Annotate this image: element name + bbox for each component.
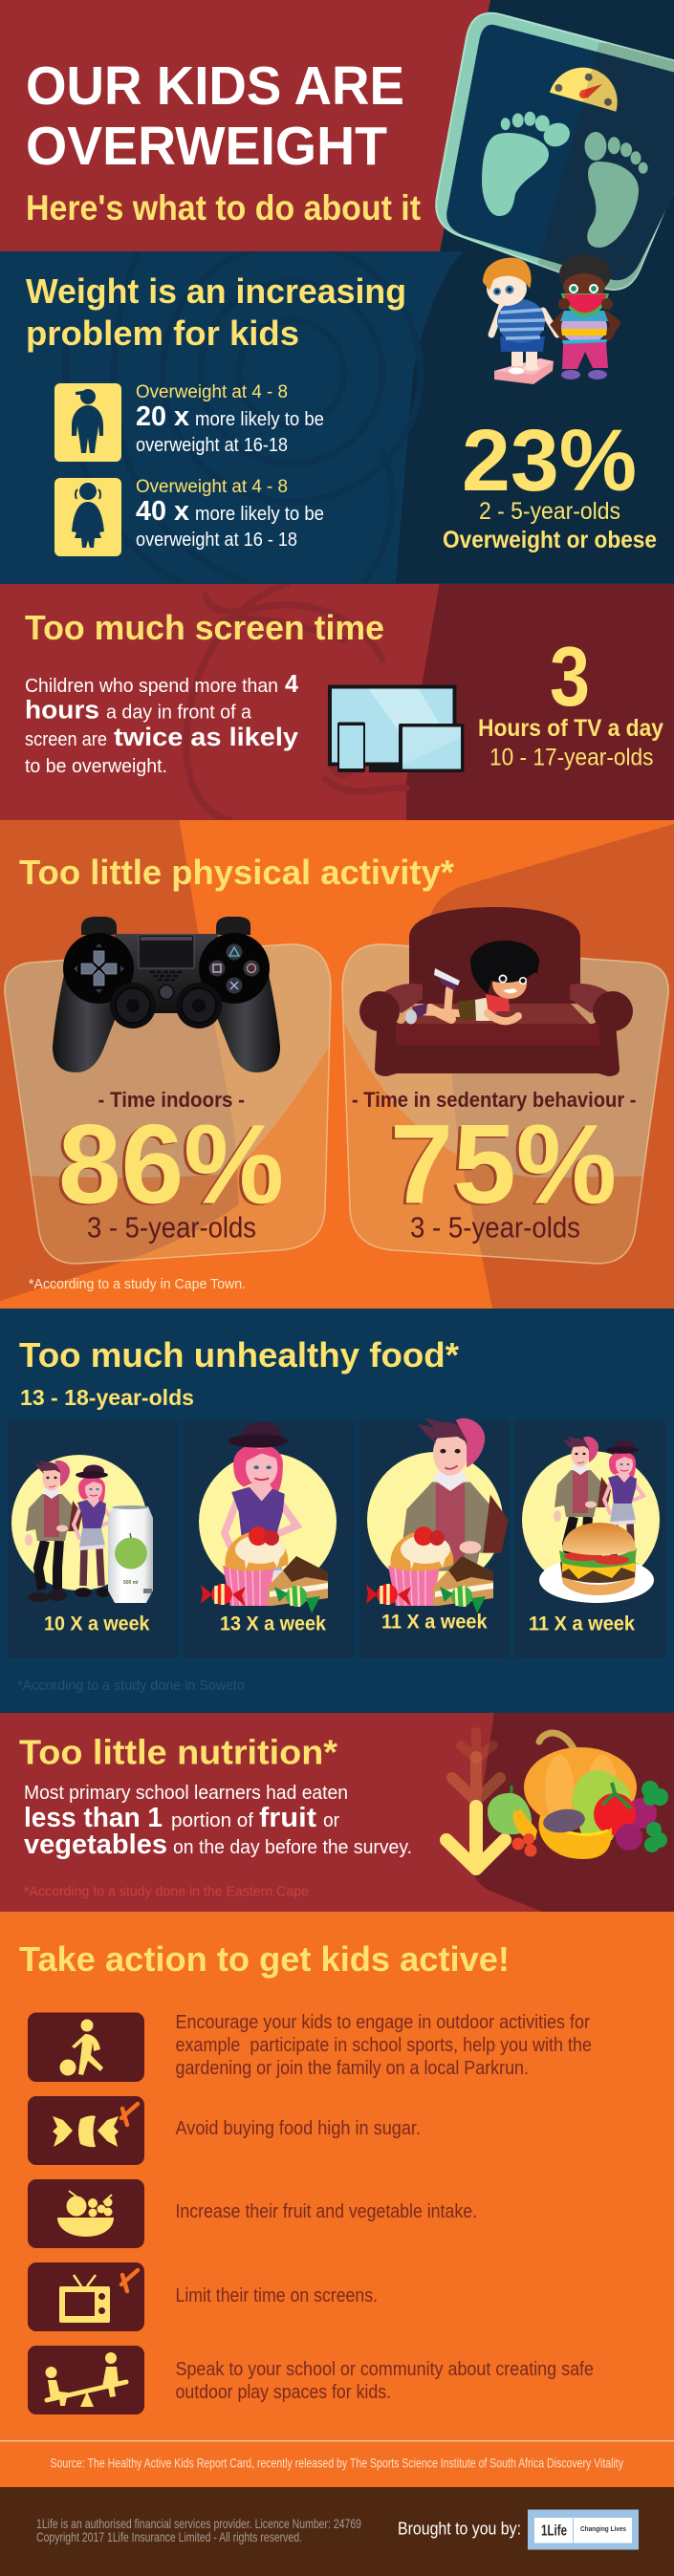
icon: burger [539,1523,654,1603]
text: Limit their time on screens. [176,2285,378,2306]
text: nutrition explanation: fruit [259,1803,316,1833]
text: outdoor play spaces for kids. [176,2382,391,2403]
panel: unhealthy food [0,1309,674,1713]
title [26,55,404,177]
panel: time indoors card [0,937,335,1264]
text: screen time explanation [25,669,299,777]
panel: weight problem [0,244,674,583]
text: Encourage your kids to engage in outdoor activities for [176,2012,590,2033]
illustration: boy on scale [483,258,557,384]
text: screen time explanation: hours [25,696,99,725]
legal text: Copyright 2017 1Life Insurance Limited - All rights reserved. [36,2529,302,2544]
icon: right foot [585,132,648,248]
text: Speak to your school or community about creating safe [176,2359,594,2380]
heading: Too much unhealthy food* [19,1335,459,1375]
action: limit screens [28,2262,378,2331]
text: nutrition explanation: or [323,1810,339,1831]
heading: Take action to get kids active! [19,1939,510,1979]
icon: soda can: 500 ml [123,1580,139,1586]
text: girls statistic: 40 x [136,496,189,527]
text: nutrition explanation: on the day before the survey. [173,1837,412,1858]
label: 11 X a week [381,1612,488,1633]
panel: screen time [0,584,674,820]
brought to you by: Brought to you by: [398,2520,521,2539]
logo: 1Life: 1Life [541,2523,567,2539]
icon: soda can [108,1505,153,1603]
text: Increase their fruit and vegetable intake. [176,2201,477,2222]
text: boys statistic: Overweight at 4 - 8 [136,382,288,402]
text: girls statistic: Overweight at 4 - 8 [136,477,288,497]
text: example participate in school sports, help you with the [176,2035,592,2056]
subheading: 13 - 18-year-olds [20,1385,194,1410]
text: boys statistic: 20 x [136,401,189,432]
panel: physical activity [0,820,674,1309]
title: OUR KIDS ARE [26,55,404,117]
panel: too little nutrition [0,1713,674,1912]
heading: Weight is an increasing [26,271,406,311]
statistic: 75 percent: 75% [387,1103,614,1229]
footnote: *According to a study done in the Eastern Cape [24,1883,309,1900]
text: nutrition explanation [24,1783,412,1860]
text: screen time explanation: a day in front of a [106,702,252,723]
icon: bathroom scale [436,13,674,315]
icon: fruit bowl [28,2179,144,2248]
text: boys statistic [136,382,324,456]
statistic: 86 percent: 86% [55,1103,281,1229]
heading: Too much screen time [25,608,384,647]
illustration: child on sofa [359,907,633,1076]
label: sedentary behaviour: - Time in sedentary behaviour - [352,1088,637,1112]
icon: child kicking ball [28,2013,144,2082]
statistic: 23 percent: Overweight or obese [443,527,657,553]
label: time indoors: - Time indoors - [98,1088,245,1112]
panel: header [0,0,674,251]
text: nutrition explanation: vegetables [24,1829,167,1860]
label: 13 X a week [220,1613,326,1634]
subtitle: Here's what to do about it [26,188,421,227]
statistic: 3 hours of TV: 10 - 17-year-olds [489,744,654,770]
action: avoid sugar [28,2096,421,2165]
illustration: fruit and vegetables [488,1733,668,1859]
text: girls statistic: more likely to be [195,504,324,525]
icon: boy silhouette [54,383,121,462]
title: OVERWEIGHT [26,116,387,177]
statistic: 23 percent: 2 - 5-year-olds [479,498,620,525]
text: Avoid buying food high in sugar. [176,2118,421,2139]
text: gardening or join the family on a local Parkrun. [176,2058,529,2079]
illustration: boy lying on sofa [405,941,539,1025]
legal text [36,2516,361,2544]
icon: seesaw [28,2346,144,2414]
card: cake and sweets [184,1420,355,1658]
heading: Too little nutrition* [19,1732,337,1772]
footnote: *According to a study in Cape Town. [29,1276,246,1292]
label: 11 X a week [529,1613,635,1634]
label: 10 X a week [44,1613,150,1634]
text: boys statistic: more likely to be [195,409,324,430]
action: more fruit [28,2179,477,2248]
icon: crossed television [28,2262,144,2331]
card: burger [514,1420,666,1658]
text [176,2359,594,2403]
text: screen time explanation: 4 [285,669,299,698]
heading [26,271,406,353]
text: screen time explanation: twice as likely [114,723,298,751]
action: safe play spaces [28,2346,594,2414]
text: nutrition explanation: Most primary school learners had eaten [24,1783,348,1804]
text: nutrition explanation: less than 1 [24,1803,163,1833]
logo: 1Life: Changing Lives [580,2526,626,2533]
heading: problem for kids [26,314,299,353]
statistic: 86 percent: 86% [58,1101,284,1227]
illustration: child eating watermelon [555,254,616,379]
footnote: *According to a study done in Soweto [17,1678,245,1694]
icon: crossed candy [28,2096,144,2165]
statistic: 75 percent: 3 - 5-year-olds [410,1210,580,1245]
statistic: 3 hours of TV [478,629,663,770]
card: soft drink [8,1420,179,1658]
statistic: 86 percent: 3 - 5-year-olds [87,1210,256,1245]
text: nutrition explanation: portion of [171,1810,253,1831]
arrow: falling intake [446,1732,505,1869]
heading: Too little physical activity* [19,853,454,892]
icon: dial [550,68,618,112]
legal text: 1Life is an authorised financial services provider. Licence Number: 24769 [36,2516,361,2531]
text: screen time explanation: Children who spend more than [25,676,278,697]
icon: devices [328,684,465,772]
logo: 1Life [528,2510,639,2550]
text: boys statistic: overweight at 16-18 [136,435,288,456]
text: girls statistic: overweight at 16 - 18 [136,530,297,551]
panel: footer [0,2487,674,2576]
panel: sedentary card [335,937,674,1264]
card: dessert [359,1418,510,1658]
text: screen time explanation: to be overweight. [25,756,167,777]
statistic: 23 percent [443,412,657,553]
panel: take action [0,1912,674,2487]
statistic: 23 percent: 23% [462,412,637,509]
icon: girl silhouette [54,478,121,556]
text [176,2012,592,2079]
text: screen time explanation: screen are [25,729,107,750]
statistic: 3 hours of TV: 3 [550,629,590,724]
statistic: 75 percent: 75% [390,1101,617,1227]
action: outdoor activities [28,2012,592,2082]
icon: left foot [482,112,574,216]
text: girls statistic [136,477,324,551]
icon: game controller [53,917,280,1072]
